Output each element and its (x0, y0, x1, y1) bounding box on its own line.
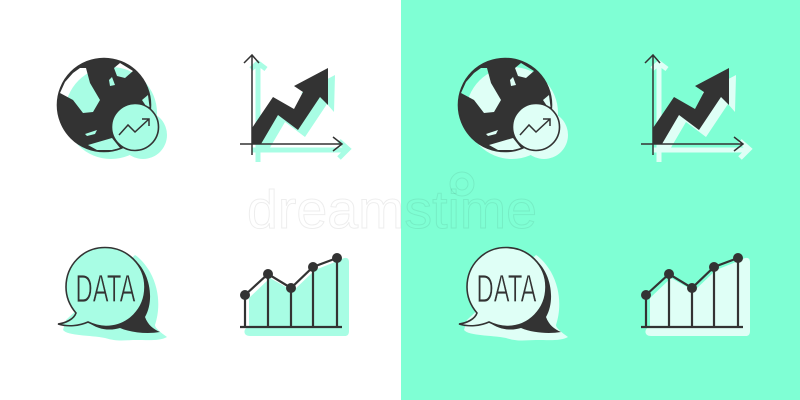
icon: rising arrow chart, pale (641, 55, 749, 162)
watermark logo: spiral (450, 172, 474, 196)
panel: light icon set (58, 55, 349, 340)
icon: globe with growth badge, pale (458, 58, 568, 159)
watermark text: dreamstime (247, 180, 537, 240)
icon: globe with growth badge (58, 58, 167, 159)
panel: white background (0, 0, 401, 400)
panel: aquamarine icon set (458, 55, 750, 340)
icon: line and bar chart, pale (641, 253, 750, 336)
text: DATA: DATA (76, 268, 136, 311)
text: DATA, pale icon: DATA (476, 268, 536, 311)
icon: data speech bubble (58, 248, 167, 340)
icon: data speech bubble, pale (459, 248, 568, 340)
watermark (247, 172, 537, 240)
panel: aquamarine background (401, 0, 800, 400)
icon: rising arrow chart (240, 55, 348, 162)
icon: line and bar chart (240, 253, 349, 336)
